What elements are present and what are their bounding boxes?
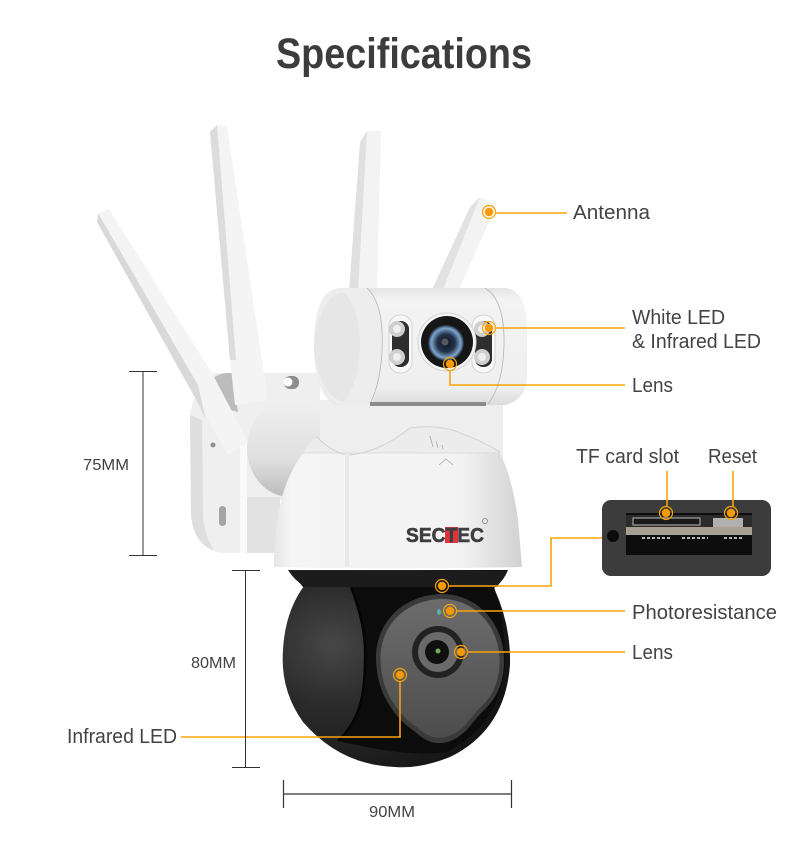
callout line: white LED (482, 322, 625, 334)
label: and Infrared LED: & Infrared LED (632, 331, 761, 353)
dome housing (274, 427, 522, 568)
antenna far left (97, 209, 248, 455)
brand logo: SECTEC (406, 525, 484, 547)
callout line: reset (724, 471, 738, 520)
top lens (418, 313, 476, 371)
front lens (412, 626, 464, 678)
label: Lens front: Lens (632, 642, 673, 664)
LED panel right (472, 315, 495, 373)
callout line: card slot link (436, 538, 602, 592)
neck (320, 400, 503, 460)
label: Lens top: Lens (632, 375, 673, 397)
label: 90MM: 90MM (369, 804, 415, 821)
front faceplate (376, 594, 504, 743)
antenna second (210, 125, 268, 405)
label: Antenna: Antenna (573, 202, 651, 224)
callout line: top lens (444, 358, 625, 385)
dimension lines (129, 372, 512, 808)
antenna third (349, 131, 381, 292)
label: Reset: Reset (708, 446, 757, 468)
camera illustration (97, 125, 527, 767)
black ball body (283, 570, 510, 767)
callout line: front lens (454, 646, 625, 658)
antenna right (431, 197, 496, 292)
label: Infrared LED: Infrared LED (67, 726, 177, 748)
SD card slot panel (602, 500, 771, 576)
label: 75MM: 75MM (83, 457, 129, 474)
callout line: antenna (482, 206, 567, 218)
label: 80MM: 80MM (191, 655, 236, 672)
leader lines and markers (181, 206, 738, 737)
label: White LED: White LED (632, 307, 725, 329)
dimension: 75mm (129, 372, 157, 556)
callout line: infrared LED (181, 668, 406, 737)
title: Specifications (276, 30, 532, 78)
dimension: 80mm (232, 570, 260, 768)
wall mount (190, 373, 333, 553)
callout line: TF card (660, 471, 672, 520)
lens head housing (314, 288, 527, 406)
callout line: photoresistance (444, 604, 625, 618)
dimension: 90mm (284, 780, 512, 808)
label: Photoresistance: Photoresistance (632, 602, 777, 624)
indicator light (437, 609, 441, 615)
LED panel left (389, 315, 412, 373)
label: TF card slot: TF card slot (576, 446, 679, 468)
